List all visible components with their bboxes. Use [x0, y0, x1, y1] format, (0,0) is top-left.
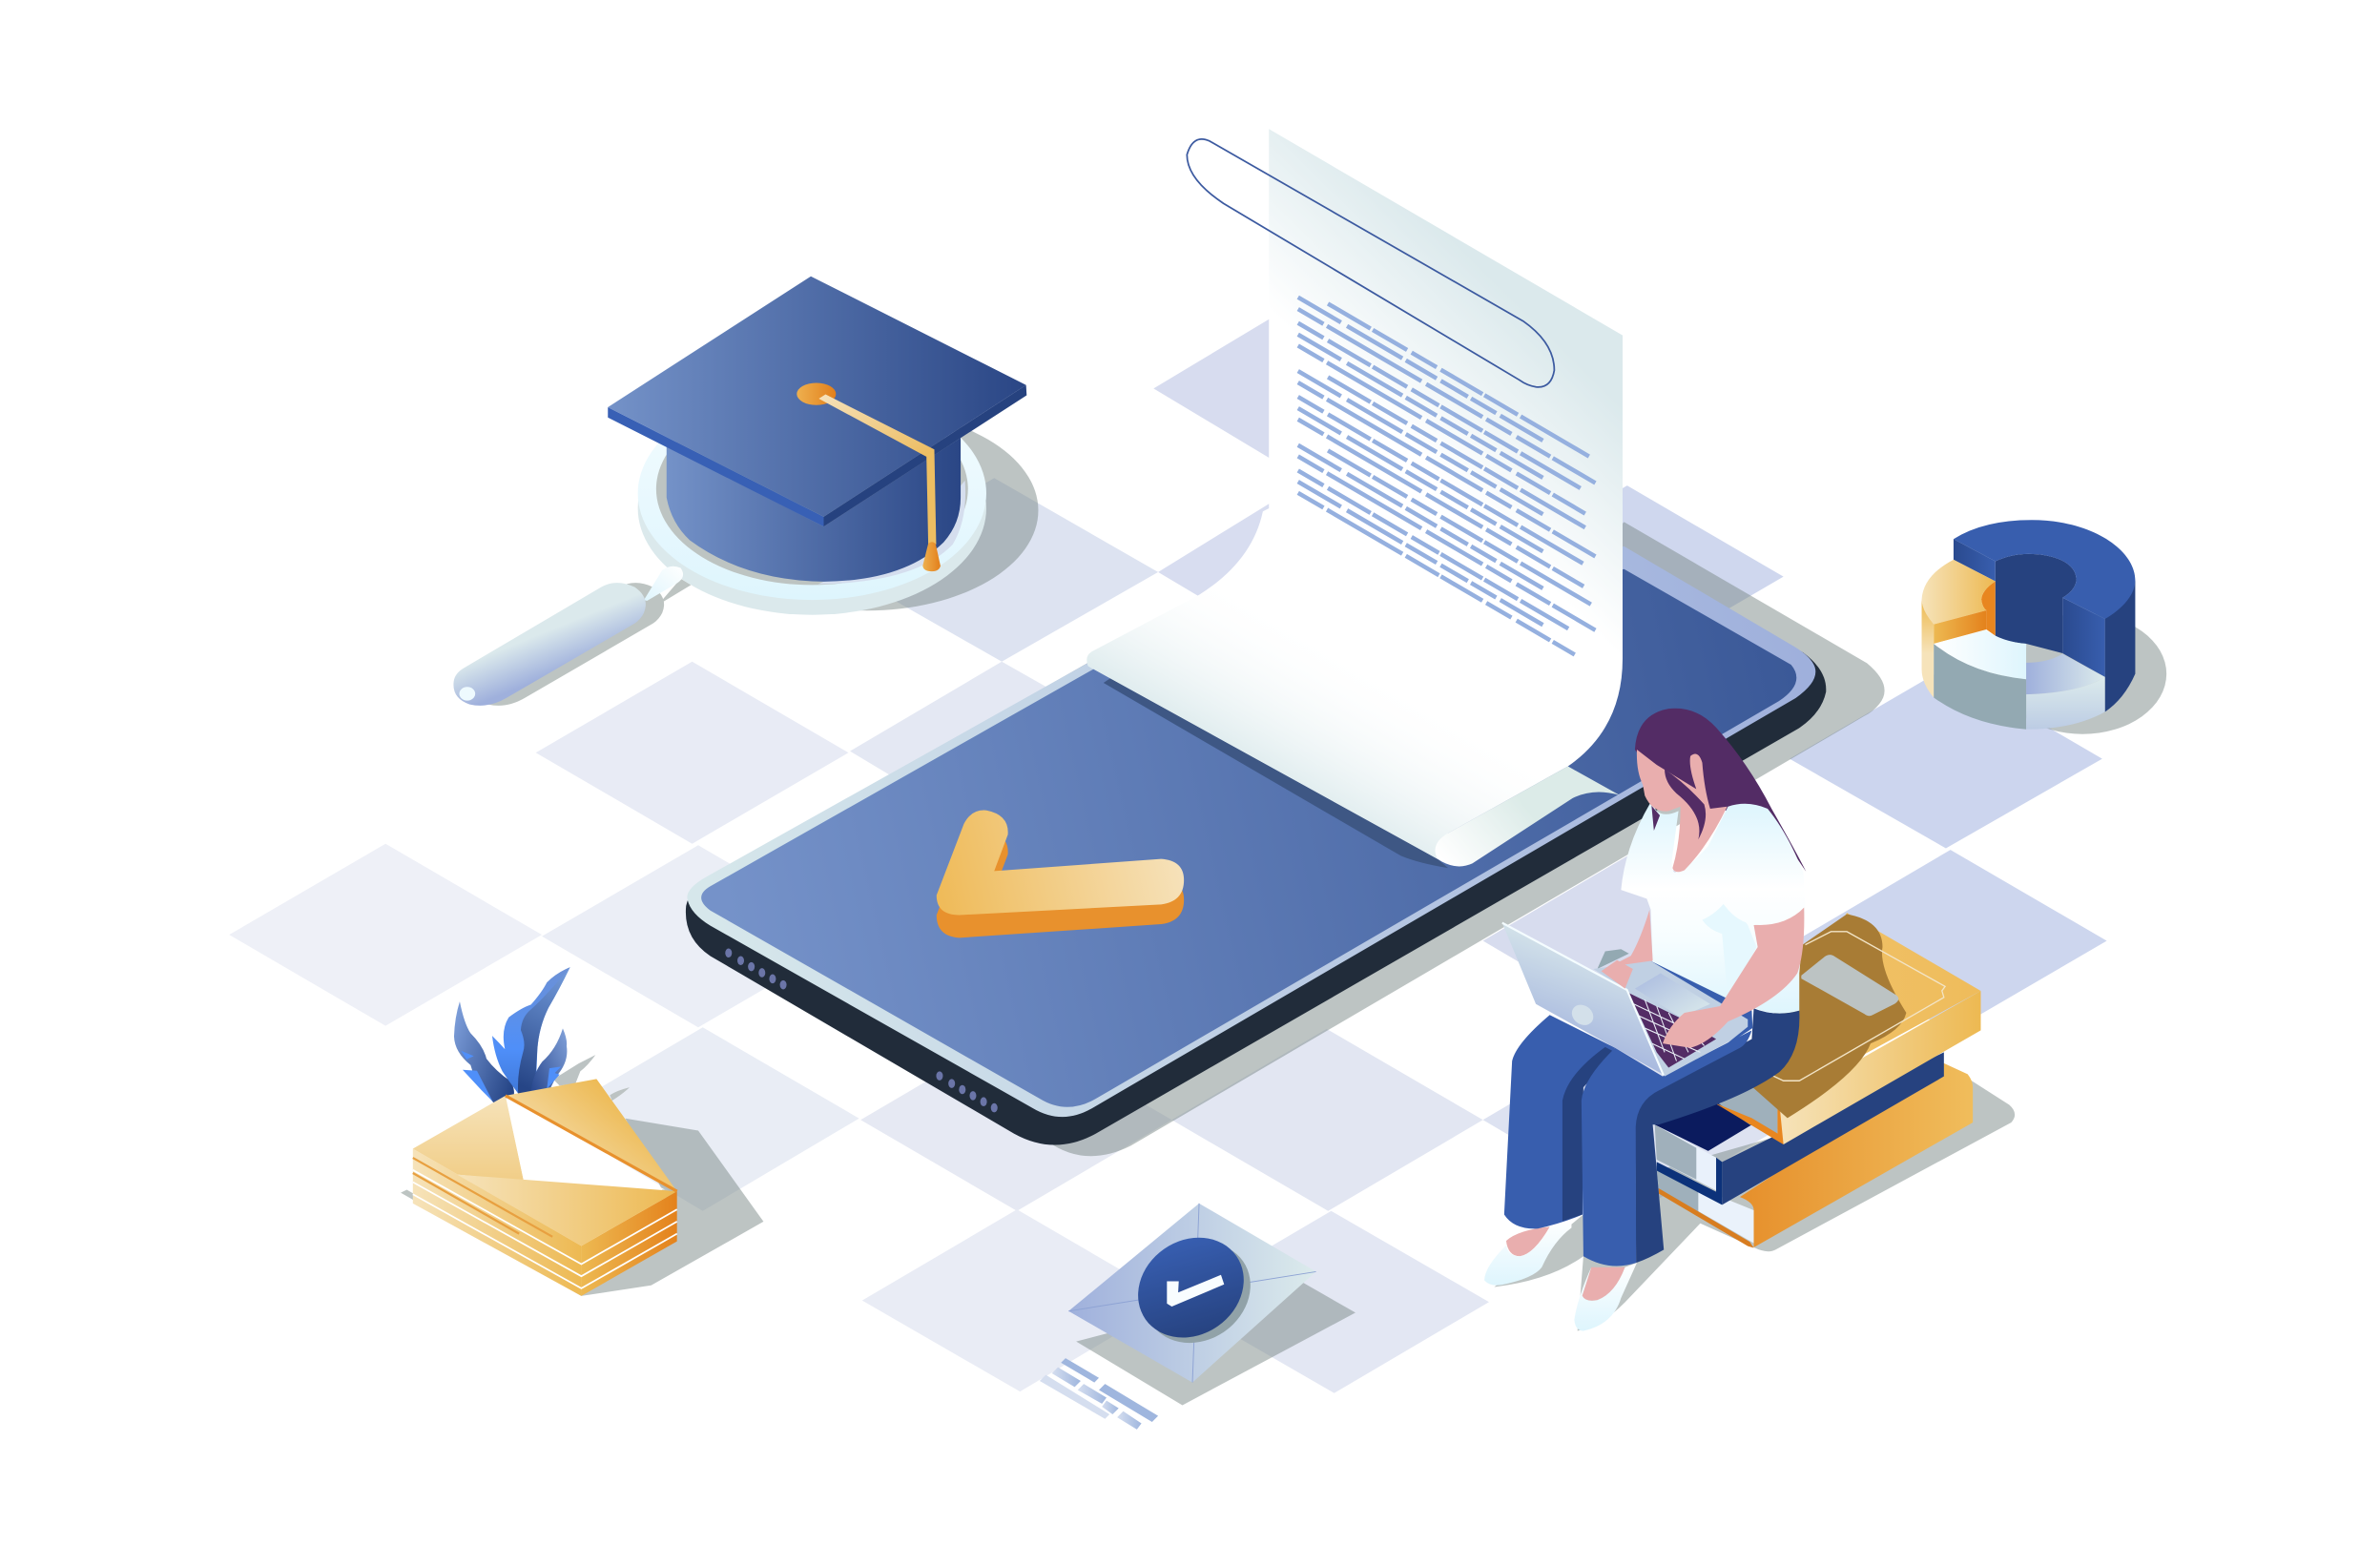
- top book: [1714, 913, 1980, 1144]
- middle book cover edge: [1657, 1158, 1722, 1205]
- tassel band: [818, 395, 935, 457]
- document text lines: [1298, 298, 1645, 679]
- card diamond: [1068, 1204, 1316, 1383]
- magnifier rim: [638, 402, 986, 615]
- hair lock: [1665, 770, 1706, 839]
- phone speaker dots left: [725, 948, 787, 989]
- left leaf: [454, 1001, 514, 1102]
- front foot: [1574, 1263, 1637, 1330]
- blue outer side: [2105, 580, 2135, 711]
- graduation cap on magnifier: [453, 277, 1038, 706]
- email check card: [1068, 1204, 1356, 1405]
- badge circle: [1119, 1217, 1263, 1358]
- card crease lines: [1068, 1204, 1316, 1383]
- cap base: [667, 438, 961, 582]
- plant leaves: [454, 967, 630, 1102]
- books and feet shadow: [1494, 1081, 2015, 1330]
- stack orange streaks: [413, 1158, 552, 1237]
- bottom book pages: [1657, 1171, 1753, 1243]
- pie shadow: [1998, 613, 2166, 734]
- sleeve: [1720, 851, 1804, 925]
- near arm: [1663, 908, 1804, 1048]
- keyboard grid: [1634, 999, 1705, 1061]
- laptop keyboard: [1629, 993, 1716, 1067]
- paper lower curl shading: [1087, 508, 1623, 859]
- shadow on book: [1748, 914, 1906, 1118]
- stack bottom shadow: [401, 1189, 581, 1296]
- paper clip: [1187, 139, 1554, 387]
- stack right side: [581, 1191, 677, 1296]
- magnifier handle: [453, 583, 646, 706]
- middle book navy top: [1655, 1083, 1777, 1151]
- pale slice side: [2026, 677, 2105, 730]
- envelope letter: [507, 1102, 665, 1189]
- back trouser leg: [1504, 1015, 1615, 1228]
- right leaf bright part: [547, 1066, 561, 1089]
- front trouser leg: [1582, 1030, 1751, 1266]
- handle end cap: [459, 687, 475, 701]
- bottom book: [1657, 1063, 1973, 1248]
- shirt: [1621, 802, 1805, 1014]
- envelope front panel: [457, 1175, 677, 1246]
- middle leaf shade: [518, 967, 570, 1094]
- far arm: [1602, 910, 1653, 989]
- white top slice: [1934, 630, 2026, 679]
- face and neck: [1637, 750, 1728, 872]
- envelope back flap: [506, 1079, 677, 1191]
- laptop trackpad: [1635, 974, 1710, 1018]
- inner grey gap: [2026, 648, 2062, 663]
- laptop base blue edge: [1651, 961, 1752, 1052]
- inner dark wall: [1996, 554, 2077, 653]
- badge check: [1167, 1275, 1224, 1307]
- laptop lid: [1502, 923, 1663, 1074]
- pale slice top: [2026, 654, 2105, 694]
- envelope left flap: [413, 1096, 581, 1246]
- laptop hinge shadow: [1597, 949, 1629, 969]
- top book pages: [1714, 1083, 1777, 1133]
- phone screen: [701, 569, 1796, 1107]
- document paper scroll: [1087, 129, 1645, 866]
- tassel button: [797, 382, 836, 405]
- envelope stack shadow: [581, 1119, 763, 1296]
- orange inner wall: [1981, 581, 1996, 636]
- left leaf bright parts: [461, 1051, 493, 1102]
- far hand: [1602, 960, 1633, 989]
- middle book spine: [1722, 1052, 1944, 1205]
- thigh shade: [1635, 1008, 1799, 1263]
- magnifier shadow: [696, 410, 1038, 610]
- orange side face: [1934, 610, 1986, 644]
- blue right inner face: [2062, 598, 2105, 677]
- middle leaf: [492, 967, 570, 1094]
- floor tiles: [229, 298, 2107, 1393]
- woman on books: [1484, 709, 2015, 1330]
- paper flap: [1436, 767, 1620, 866]
- blue top slice: [1954, 520, 2135, 619]
- phone body: [686, 549, 1826, 1145]
- laptop base: [1593, 961, 1751, 1077]
- magnifier lens: [656, 393, 968, 585]
- small text dashes: [1040, 1358, 1158, 1430]
- phone speaker dots right: [936, 1071, 998, 1112]
- middle book shaded pages: [1655, 1124, 1696, 1180]
- cap board right edge: [823, 385, 1026, 526]
- lid bright edges: [1502, 923, 1664, 1075]
- card shadow: [1076, 1283, 1356, 1405]
- stack left side: [413, 1149, 581, 1296]
- grey front slice side: [1934, 644, 2026, 730]
- top book cover edge: [1714, 1102, 1784, 1144]
- middle book: [1655, 1052, 1944, 1205]
- badge shadow: [1126, 1223, 1270, 1363]
- hair back: [1635, 709, 1806, 872]
- magnifier ring: [638, 387, 986, 600]
- magnifier neck: [644, 566, 683, 601]
- bottom book shaded pages: [1657, 1171, 1698, 1215]
- blue left face: [1954, 539, 1996, 581]
- middle book pages: [1655, 1124, 1716, 1190]
- orange outer side: [1922, 599, 1934, 697]
- leaf shadows: [553, 1055, 630, 1101]
- phone shadow: [1002, 522, 1885, 1156]
- tassel end: [922, 542, 941, 571]
- pie chart: [1922, 520, 2166, 734]
- book label: [1801, 955, 1898, 1016]
- lens highlight: [818, 481, 965, 585]
- lid logo: [1569, 1001, 1596, 1029]
- shirt lower fold: [1703, 898, 1756, 999]
- top book cover: [1748, 913, 1980, 1101]
- orange top slice: [1922, 560, 1996, 625]
- cap board top: [608, 277, 1026, 517]
- envelope flap fold line: [506, 1096, 677, 1191]
- back foot: [1484, 1219, 1571, 1286]
- stack page lines: [413, 1170, 677, 1288]
- top book spine: [1779, 991, 1980, 1144]
- magnifier neck shadow: [659, 579, 691, 605]
- handle shadow: [472, 583, 664, 706]
- cap board left edge: [608, 407, 823, 526]
- hair lock near face: [1651, 806, 1660, 831]
- bottom book spine: [1740, 1063, 1973, 1247]
- phone frame: [687, 546, 1815, 1117]
- tassel cord: [926, 451, 936, 545]
- check mark on screen: [937, 811, 1184, 937]
- cover ornament: [1769, 932, 1945, 1081]
- paper shadow on screen: [1104, 677, 1448, 868]
- right leaf: [531, 1028, 567, 1092]
- bottom book cover edge: [1659, 1188, 1753, 1248]
- smartphone: [686, 546, 1826, 1145]
- envelope stack: [401, 1079, 763, 1296]
- laptop: [1502, 923, 1752, 1077]
- back trouser shade: [1563, 1047, 1615, 1221]
